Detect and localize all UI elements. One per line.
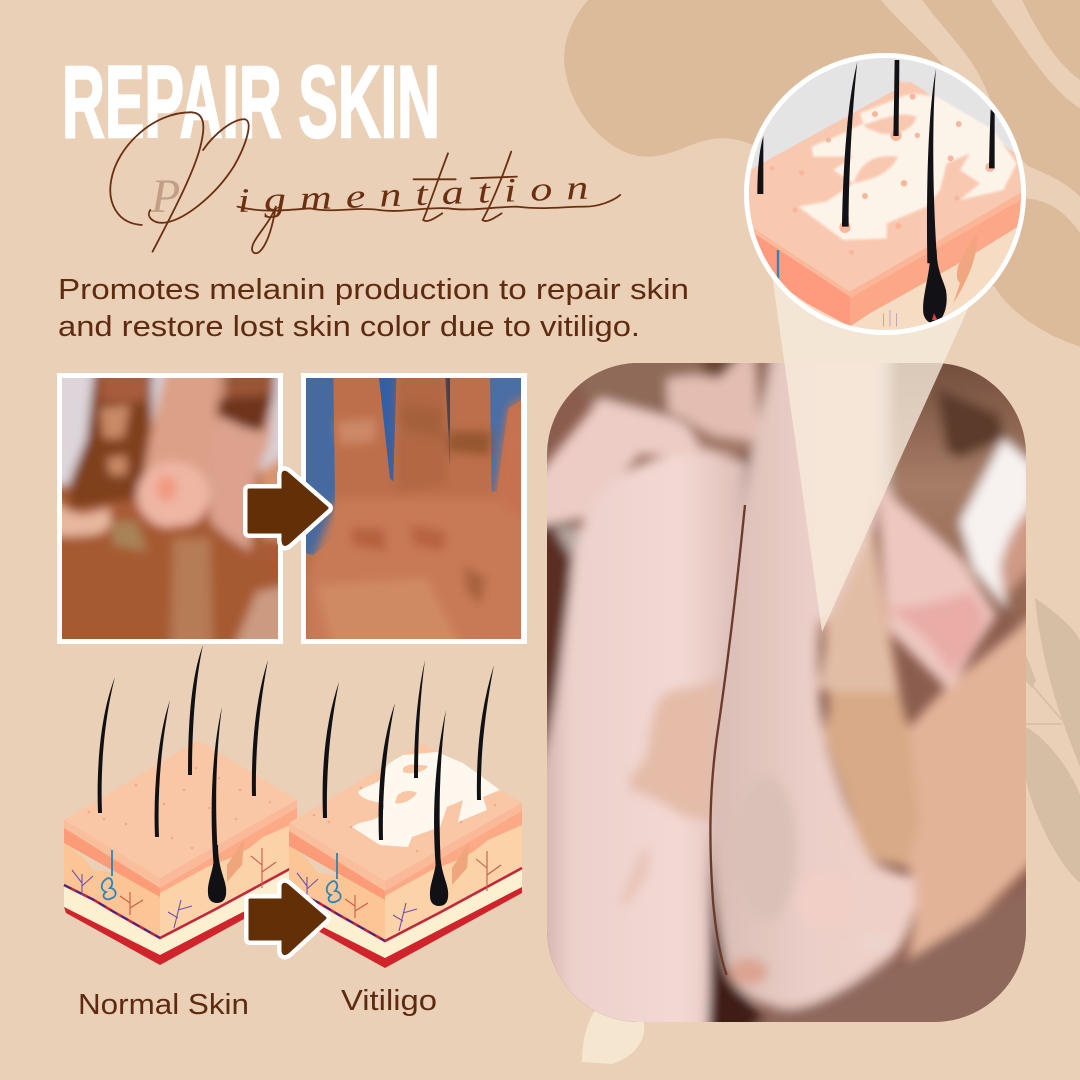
- diagram: normal skin: [64, 645, 297, 965]
- photo: hand before: [57, 373, 283, 644]
- shadow below fist: [686, 426, 751, 462]
- subtitle: Promotes melanin production to repair skin: [58, 274, 689, 306]
- elbow tones: [760, 782, 796, 915]
- arrow: before to after (photos): [249, 472, 327, 544]
- photo: hand after: [301, 373, 527, 644]
- callout beam: [770, 260, 990, 632]
- callout circle: skin close-up: [744, 53, 1026, 335]
- label: Normal Skin: Normal Skin: [78, 989, 249, 1021]
- hair follicle: [208, 845, 226, 903]
- fist: [667, 342, 760, 442]
- arrow: normal to vitiligo: [250, 884, 325, 954]
- title: Repair Skin: REPAIR SKIN: [62, 45, 440, 159]
- upper arm: [527, 398, 747, 528]
- leg pigment patches: [630, 675, 722, 822]
- dark gap: [700, 455, 787, 1048]
- photo: arm and leg with vitiligo: [547, 363, 1026, 1022]
- diagram: vitiligo skin: [289, 660, 522, 968]
- dark below elbow: [746, 888, 1026, 1022]
- hand: [877, 482, 997, 692]
- forearm: [710, 342, 917, 1008]
- leg: [527, 455, 747, 1048]
- upper arm tan: [818, 553, 1026, 964]
- script heading: Pigmentation: P: [150, 170, 180, 223]
- subtitle: [58, 274, 689, 343]
- shirt: [960, 438, 1033, 608]
- script heading: Pigmentation: igmentation: [237, 168, 589, 220]
- top shadows: [580, 363, 774, 424]
- label: Vitiligo: Vitiligo: [341, 985, 437, 1017]
- hair follicle: [430, 848, 448, 906]
- subtitle: and restore lost skin color due to vitiligo.: [58, 311, 640, 343]
- decorative blobs: [564, 0, 1080, 1064]
- script heading: Pigmentation: [110, 112, 620, 253]
- dark tan patch: [823, 690, 920, 867]
- gap line between leg and forearm: [710, 505, 745, 975]
- hair follicle: [923, 250, 947, 323]
- left dark strip: [527, 522, 573, 795]
